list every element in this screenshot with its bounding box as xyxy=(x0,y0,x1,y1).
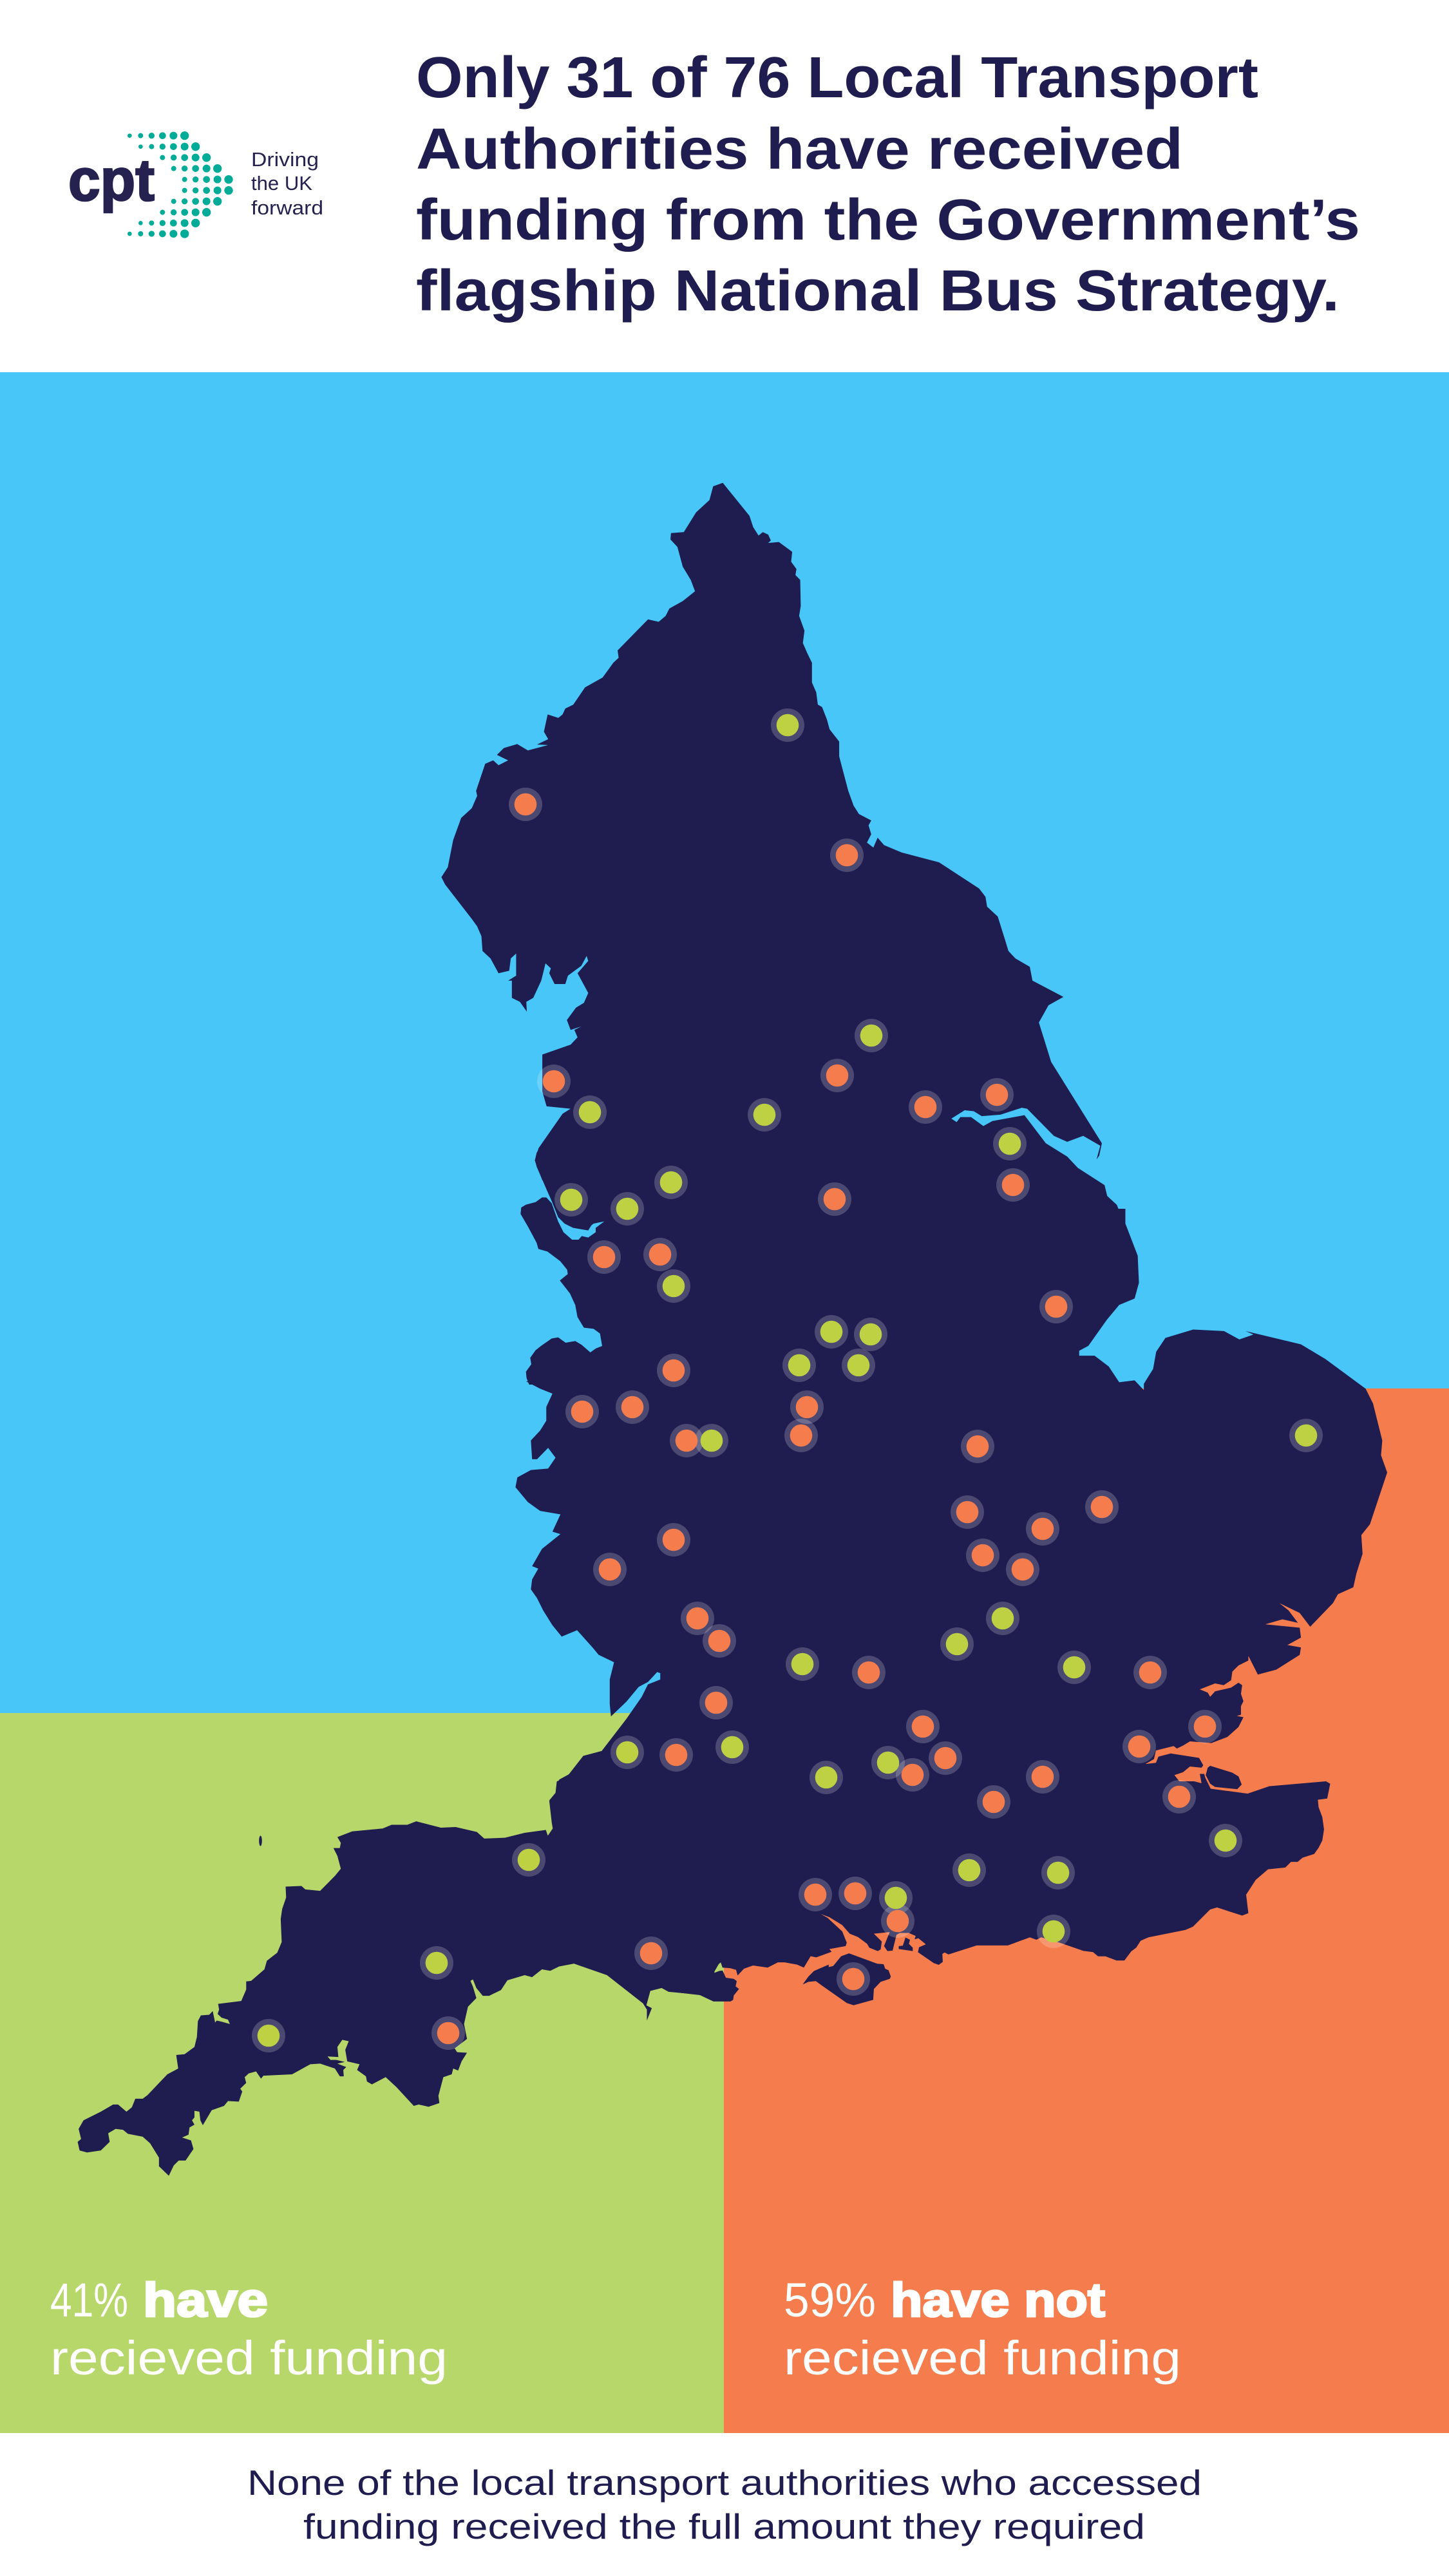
legend: 59% have not received funding xyxy=(784,2273,1181,2385)
legend: 41% have received funding: 41% xyxy=(50,2273,128,2327)
title xyxy=(416,46,1360,323)
panel: background sea xyxy=(0,372,1449,2433)
legend: 41% have received funding: recieved funding xyxy=(50,2331,448,2385)
logo tagline: forward xyxy=(251,196,323,219)
footnote: None of the local transport authorities who accessed xyxy=(247,2463,1202,2503)
title: flagship National Bus Strategy. xyxy=(416,259,1340,323)
title: Only 31 of 76 Local Transport xyxy=(416,46,1258,110)
logo tagline: Driving xyxy=(251,148,319,171)
footnote xyxy=(247,2463,1202,2546)
footnote: funding received the full amount they required xyxy=(303,2506,1145,2546)
legend: 59% have not received funding: 59% xyxy=(784,2273,876,2327)
map of England xyxy=(78,483,1387,2176)
panel: not funded share xyxy=(724,1388,1449,2433)
legend: 59% have not received funding: have not xyxy=(891,2273,1105,2327)
legend: 59% have not received funding: recieved funding xyxy=(784,2331,1181,2385)
legend: 41% have received funding: have xyxy=(143,2273,268,2327)
legend: 41% have received funding xyxy=(50,2273,448,2385)
location dots: funded authorities xyxy=(258,714,1317,2047)
logo tagline xyxy=(251,148,323,219)
logo: CPT Driving the UK forward xyxy=(68,131,323,238)
location dot halos xyxy=(252,708,1323,2052)
logo icon: dotted arrow xyxy=(128,131,233,238)
location dots: unfunded authorities xyxy=(437,793,1216,2044)
title: funding from the Government’s xyxy=(416,188,1360,252)
logo tagline: the UK xyxy=(251,172,312,194)
title: Authorities have received xyxy=(416,117,1183,182)
panel: funded share xyxy=(0,1713,724,2433)
logo wordmark: cpt: cpt xyxy=(68,147,155,213)
